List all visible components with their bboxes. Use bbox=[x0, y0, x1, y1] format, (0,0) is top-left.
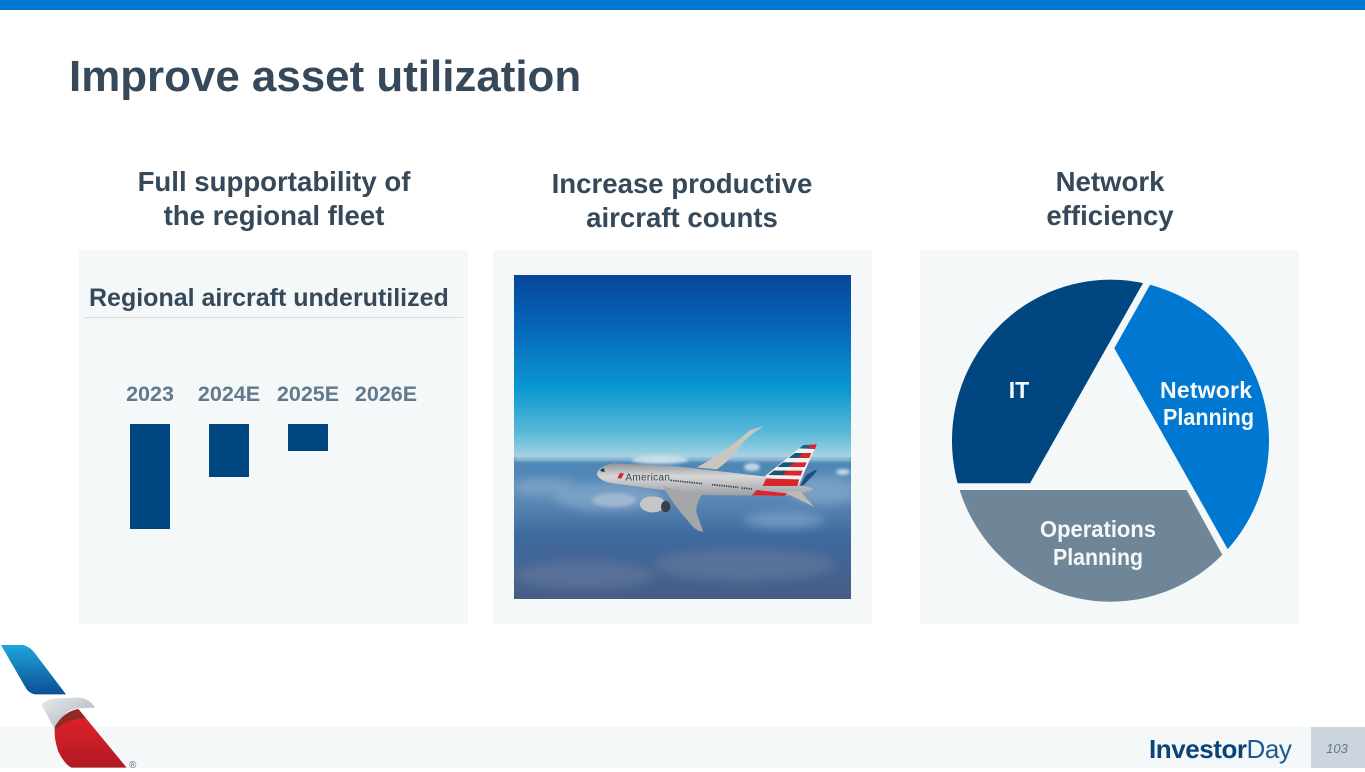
heading: regional fleet: Full supportability of bbox=[138, 166, 410, 197]
airline name: American bbox=[625, 473, 670, 484]
near wing bbox=[663, 487, 703, 532]
blue wing bbox=[1, 645, 66, 694]
cockpit bbox=[600, 468, 605, 472]
photo: aircraft in flight bbox=[514, 275, 851, 599]
heading: aircraft counts: aircraft counts bbox=[586, 202, 778, 233]
red wing shadow bbox=[55, 709, 86, 730]
heading: network efficiency: efficiency bbox=[1046, 200, 1174, 231]
title: Improve asset utilization bbox=[69, 52, 581, 101]
far wing bbox=[697, 426, 764, 469]
segment: Operations Planning: Operations bbox=[1040, 516, 1156, 542]
panel: aircraft photo bbox=[493, 250, 872, 624]
label: 2023: 2023 bbox=[126, 382, 174, 406]
windows bbox=[671, 480, 752, 489]
heading: network efficiency: Network bbox=[1056, 166, 1164, 197]
sky bbox=[514, 275, 851, 458]
segment: IT: IT bbox=[1009, 377, 1029, 403]
heading: aircraft counts: Increase productive bbox=[552, 168, 812, 199]
panel: network efficiency bbox=[920, 250, 1299, 624]
aircraft bbox=[597, 426, 817, 532]
segment: Operations Planning: Planning bbox=[1053, 544, 1143, 570]
stabiliser bbox=[800, 469, 817, 486]
label: 2025E: 2025E bbox=[277, 382, 339, 406]
segment: IT bbox=[952, 280, 1143, 483]
fuselage bbox=[597, 463, 813, 496]
bar: 2025E bbox=[288, 424, 328, 451]
registered mark: ® bbox=[129, 760, 136, 771]
segment: Network Planning: Planning bbox=[1163, 404, 1254, 430]
segment: Operations Planning bbox=[960, 490, 1222, 602]
bar: 2023 bbox=[130, 424, 170, 529]
segment: Network Planning bbox=[1114, 285, 1269, 549]
label: 2026E: 2026E bbox=[355, 382, 417, 406]
cloud layer bbox=[509, 453, 859, 599]
segment: Network Planning: Network bbox=[1160, 377, 1252, 403]
heading: network efficiency bbox=[1046, 166, 1174, 231]
chart rule bbox=[84, 317, 463, 318]
heading: aircraft counts bbox=[552, 168, 812, 233]
tail stripes on body bbox=[763, 479, 799, 486]
panel: regional aircraft bar chart bbox=[79, 250, 468, 624]
chart title: Regional aircraft underutilized bbox=[89, 284, 449, 312]
page number: 103 bbox=[1326, 741, 1348, 756]
footer band bbox=[0, 727, 1365, 768]
footer logo: InvestorDay: InvestorDay bbox=[1149, 734, 1291, 764]
page number box bbox=[1311, 727, 1365, 768]
label: 2024E: 2024E bbox=[198, 382, 260, 406]
icon: airline flight symbol logo bbox=[1, 645, 127, 768]
heading: regional fleet: the regional fleet bbox=[164, 200, 384, 231]
heading: regional fleet bbox=[138, 166, 410, 231]
bar: 2024E bbox=[209, 424, 249, 477]
silver wing bbox=[42, 698, 95, 730]
logo mark bbox=[617, 473, 624, 479]
top bar bbox=[0, 0, 1365, 10]
engine bbox=[640, 496, 665, 512]
pie diagram bbox=[952, 280, 1269, 602]
tail fin bbox=[763, 444, 817, 486]
red wing bbox=[55, 709, 127, 768]
